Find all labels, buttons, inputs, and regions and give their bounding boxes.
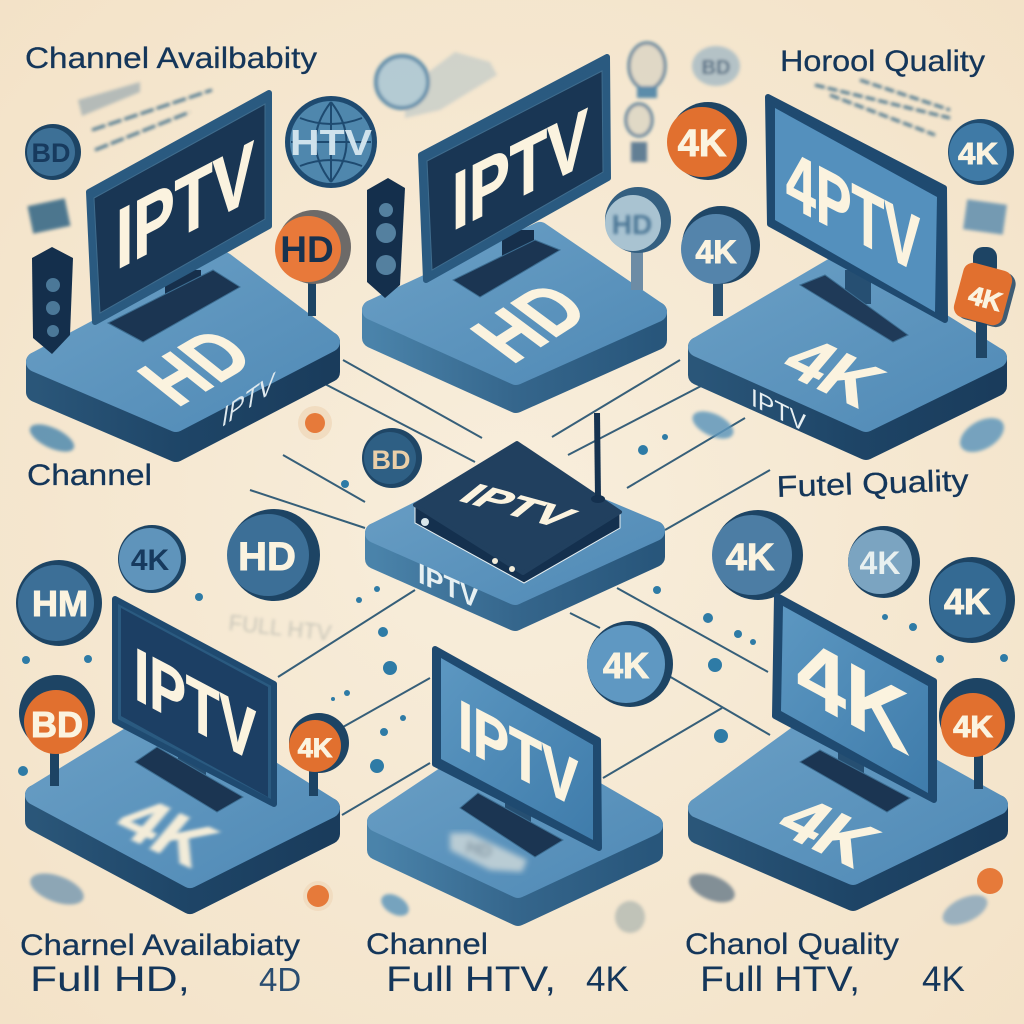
globe badge: HTV: HTV	[290, 122, 372, 163]
caption: column 3: 4K	[922, 960, 965, 999]
badge: 4K between monitors: 4K	[603, 645, 649, 686]
monitor 6: 4K	[797, 616, 909, 774]
badge: 4K center right	[712, 510, 803, 600]
badge: 4K lower left: 4K	[131, 544, 170, 577]
heading: top left: Channel Availbabity	[25, 42, 317, 75]
caption: column 1: Full HD,	[30, 960, 190, 999]
pin badge: BD orange: BD	[31, 704, 83, 745]
speaker 1	[32, 247, 73, 354]
monitor 6	[775, 596, 934, 812]
caption: column 1: Charnel Availabiaty	[20, 929, 300, 962]
badge: 4K right: 4K	[958, 136, 998, 171]
badge: HM far left	[16, 560, 102, 646]
blurred decorative icons: BD	[702, 57, 730, 79]
platform 5	[377, 738, 653, 916]
caption: column 3: Full HTV,	[700, 960, 860, 999]
pin badge: 4K orange right: 4K	[965, 280, 1005, 317]
badge: 4K between monitors	[587, 621, 673, 707]
heading: middle right: Futel Quality	[776, 464, 969, 504]
pin badge: HD orange	[275, 210, 351, 316]
platform 4	[35, 710, 330, 904]
platform 3	[698, 262, 997, 450]
monitor 4	[115, 599, 274, 812]
badge: 4K far right: 4K	[944, 581, 990, 622]
badge: HD lower left: HD	[238, 535, 296, 579]
platform label: HD: HD	[452, 269, 607, 376]
badge: HM far left: HM	[32, 583, 88, 624]
small orange marker lower right	[977, 868, 1003, 894]
monitor 1: IPTV	[116, 122, 254, 288]
monitor 5: IPTV	[458, 685, 578, 823]
platform label: HD: HD	[120, 315, 272, 419]
monitor 2	[421, 57, 608, 297]
set-top box with antenna: IPTV	[450, 479, 585, 534]
caption: column 2: 4K	[586, 960, 629, 999]
pin badge: 4K orange	[289, 713, 349, 796]
monitor 4: IPTV	[134, 631, 256, 779]
platform label: IPTV: IPTV	[222, 367, 276, 433]
pin badge: BD orange	[19, 675, 95, 786]
platform label: 4K: 4K	[769, 324, 897, 420]
badge: 4K center right: 4K	[726, 537, 775, 579]
pin badge: 4K orange right	[952, 247, 1018, 358]
platform center	[375, 468, 655, 621]
platform 6	[698, 712, 998, 901]
badge: 4K lower right	[848, 526, 920, 598]
badge: BD top left: BD	[32, 138, 70, 168]
platform label: blurred	[450, 833, 527, 872]
pin badge: 4K orange lower right: 4K	[953, 709, 993, 744]
pin badge: 4K blue: 4K	[696, 234, 736, 270]
badge: BD center	[362, 428, 422, 488]
caption: column 2	[366, 928, 629, 999]
pin badge: HD muted	[605, 187, 671, 290]
badge: 4K orange top	[667, 102, 747, 180]
platform 2	[372, 232, 657, 403]
monitor 3	[768, 97, 945, 342]
pin badge: HD muted: HD	[612, 209, 652, 240]
heading: middle left: Channel	[27, 459, 152, 492]
caption: column 1	[20, 929, 301, 999]
scattered dots	[18, 434, 1008, 776]
small orange marker lower	[303, 881, 333, 911]
badge: 4K lower left	[118, 525, 186, 593]
faint label: Full HTV: FULL HTV	[227, 610, 333, 646]
platform label: blurred: HD	[464, 836, 494, 862]
platform 1	[36, 262, 330, 452]
platform label: 4K: 4K	[102, 784, 230, 880]
badge: 4K orange top: 4K	[678, 123, 727, 165]
caption: column 2: Full HTV,	[386, 960, 556, 999]
pin badge: 4K blue	[681, 206, 760, 316]
heading: top right: Horool Quality	[780, 45, 985, 78]
connector lines	[250, 360, 770, 815]
monitor 2: IPTV	[452, 90, 588, 248]
platform label: IPTV: IPTV	[751, 382, 806, 438]
monitor 3: 4PTV	[786, 133, 920, 292]
monitor 5	[435, 649, 599, 857]
badge: BD center: BD	[372, 445, 410, 475]
small orange marker	[298, 406, 332, 440]
speaker 2	[367, 178, 405, 298]
badge: 4K lower right: 4K	[860, 545, 900, 581]
platform label: 4K: 4K	[764, 784, 892, 880]
globe badge: HTV	[285, 96, 377, 188]
set-top box with antenna	[415, 413, 620, 583]
badge: 4K right	[948, 119, 1014, 185]
badge: 4K far right	[929, 557, 1015, 643]
pin badge: 4K orange: 4K	[298, 733, 333, 763]
pin badge: 4K orange lower right	[939, 678, 1015, 789]
monitor 1	[89, 93, 269, 342]
caption: column 1: 4D	[259, 961, 301, 998]
caption: column 3	[685, 928, 965, 999]
caption: column 2: Channel	[366, 928, 488, 961]
platform label: IPTV: IPTV	[418, 557, 478, 616]
caption: column 3: Chanol Quality	[685, 928, 899, 961]
badge: BD top left	[25, 124, 81, 180]
pin badge: HD orange: HD	[280, 229, 334, 270]
badge: HD lower left	[227, 509, 320, 601]
